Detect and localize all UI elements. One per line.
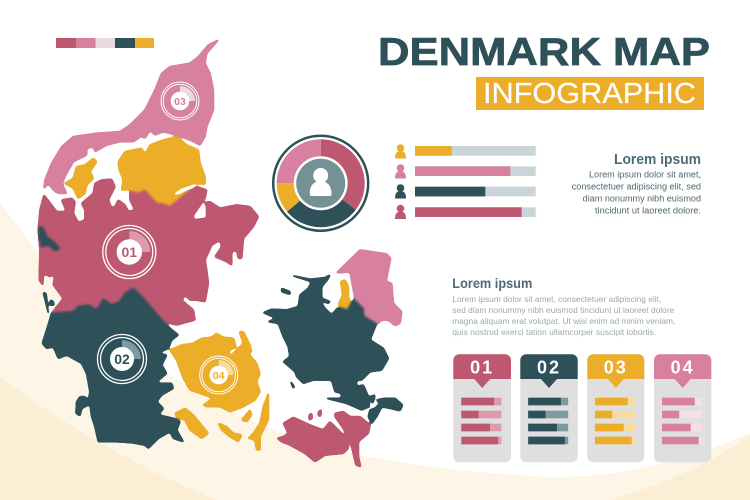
- text block: upper right: [572, 152, 701, 216]
- region: Lolland and Falster (maroon): [277, 410, 370, 467]
- badge 03: 03: [174, 96, 186, 108]
- card 01: 01: [470, 357, 494, 377]
- icon: maroon person: [395, 205, 406, 219]
- card 04: [654, 354, 711, 462]
- text block: upper right: tincidunt ut laoreet dolore.: [595, 206, 701, 216]
- icon: person in donut centre: [310, 168, 332, 196]
- badge 03: [161, 82, 199, 120]
- card 02: [520, 354, 578, 462]
- card 01: [453, 354, 511, 462]
- region: north-central Jutland (yellow): [65, 137, 205, 207]
- text block: upper right: Lorem ipsum dolor sit amet,: [589, 170, 701, 180]
- bar chart: four people: [395, 144, 536, 219]
- subtitle banner: INFOGRAPHIC: [483, 78, 696, 110]
- card 03: [587, 354, 644, 462]
- card 02: 02: [537, 357, 561, 377]
- title: DENMARK MAP: [378, 31, 710, 74]
- region: Copenhagen area (pink): [337, 250, 402, 326]
- region: Funen (yellow): [170, 332, 268, 450]
- text block: middle right: Lorem ipsum dolor sit amet, consectetuer adipiscing elit,: [452, 294, 661, 304]
- text block: upper right: consectetuer adipiscing elit, sed: [572, 182, 701, 192]
- region: Zealand (dark teal): [263, 275, 403, 423]
- donut chart: [273, 136, 368, 231]
- text block: middle right: quis nostrud exerci tation ullamcorper suscipit lobortis.: [452, 327, 656, 337]
- region: northern Jutland (pink): [44, 40, 218, 193]
- region: north Zealand spot (yellow): [338, 280, 350, 308]
- badge 04: [200, 356, 238, 394]
- text block: upper right: diam nonummy nibh euismod: [583, 194, 701, 204]
- map of Denmark: [38, 40, 403, 467]
- text block: middle right: [452, 276, 675, 337]
- region: southern Jutland (dark teal): [39, 227, 183, 448]
- badge 01: [103, 226, 156, 278]
- text block: middle right: Lorem ipsum: [452, 276, 532, 291]
- text block: upper right: Lorem ipsum: [614, 152, 701, 168]
- icon: pink person: [395, 164, 406, 178]
- card 03: 03: [604, 357, 628, 377]
- badge 04: 04: [213, 370, 225, 382]
- icon: teal person: [395, 184, 406, 198]
- badge 02: 02: [114, 351, 130, 367]
- badge 01: 01: [122, 244, 137, 260]
- region: central Jutland (maroon): [38, 179, 258, 325]
- badge 02: [98, 334, 146, 384]
- text block: middle right: magna aliquam erat volutpat. Ut wisi enim ad minim veniam,: [452, 316, 675, 326]
- icon: yellow person: [395, 144, 406, 158]
- text block: middle right: sed diam nonummy nibh euismod tincidunt ut laoreet dolore: [452, 305, 675, 315]
- colour palette strip: [56, 38, 154, 48]
- card 04: 04: [671, 357, 695, 377]
